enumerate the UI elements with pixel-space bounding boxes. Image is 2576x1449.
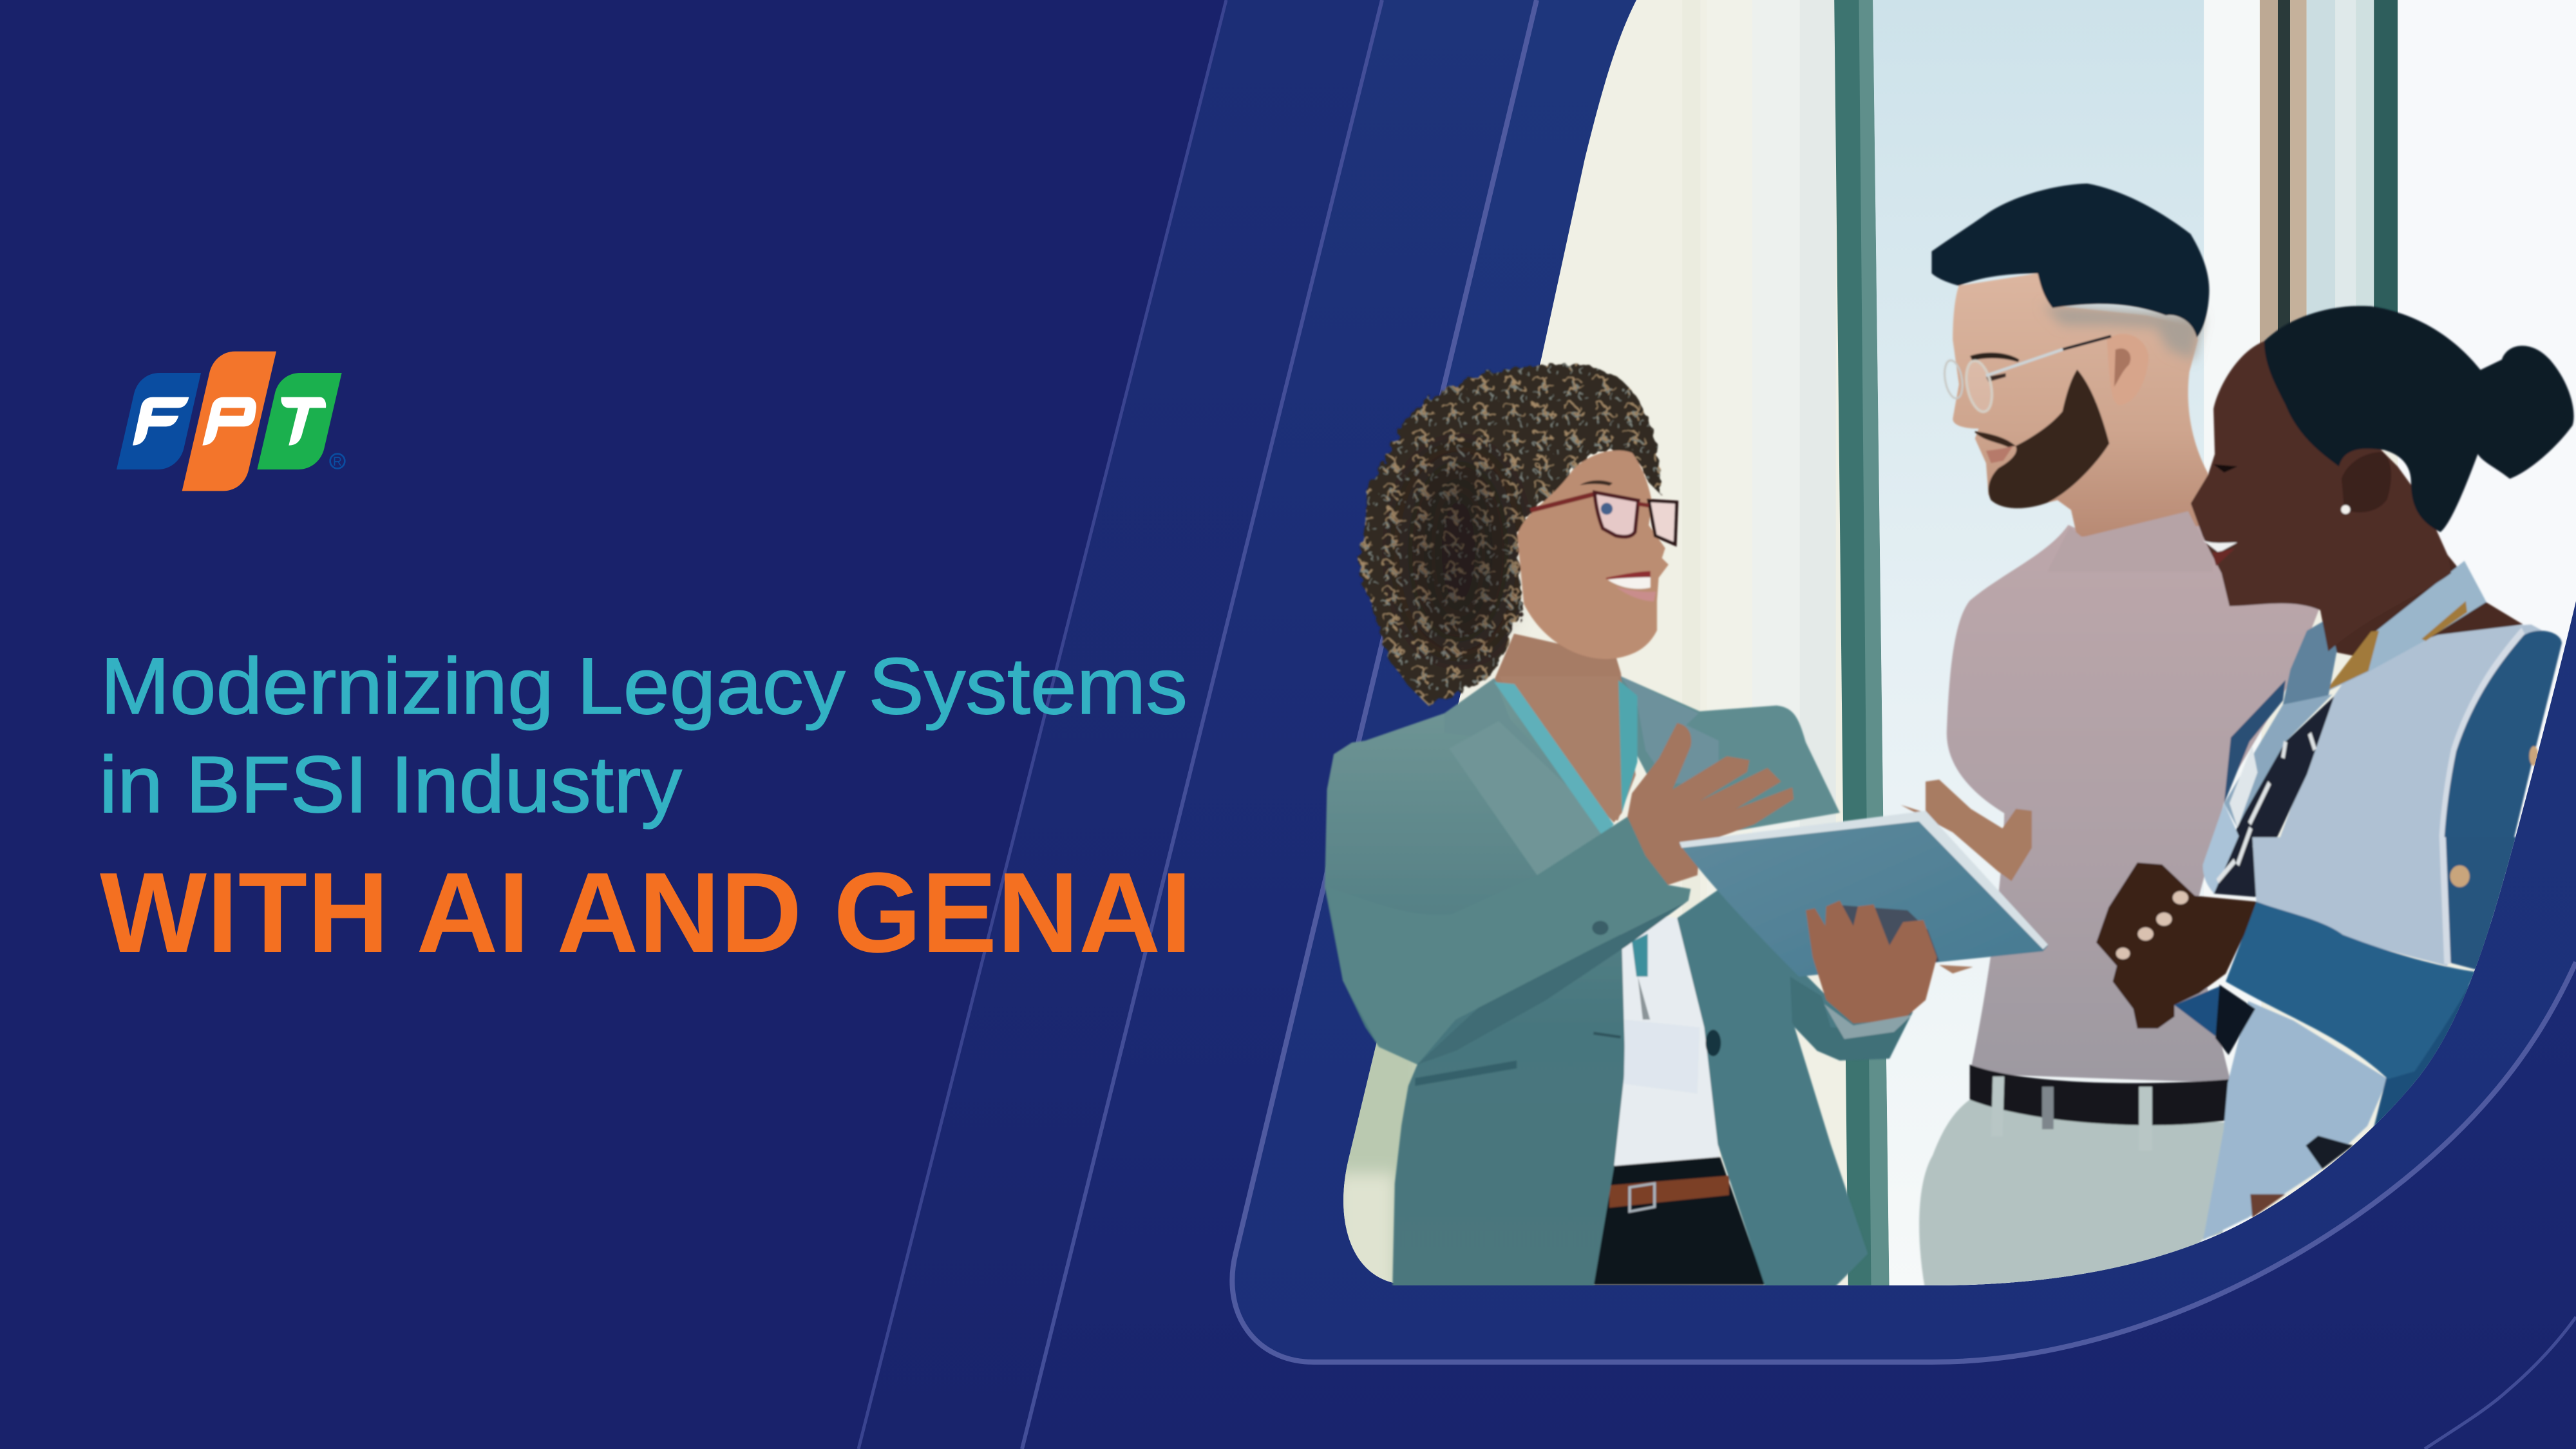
man's head [1932, 184, 2213, 572]
logo registered mark [330, 454, 345, 469]
collar [2048, 511, 2213, 572]
photo: people [1325, 184, 2574, 1287]
neck [2323, 553, 2523, 659]
blouse, trim and cardigan above the sleeve [2252, 837, 2519, 972]
hand holding tablet [1790, 977, 1912, 1061]
logo tile: T [257, 373, 342, 469]
sky [1873, 0, 2204, 1294]
man in pink sweater [1919, 184, 2319, 1286]
logo tile: F [117, 373, 201, 469]
shirt [1551, 762, 1720, 1167]
left lapel [1444, 678, 1614, 844]
woman with curly hair [1325, 363, 2048, 1287]
woman in blue cardigan [2096, 306, 2574, 1240]
tablet [1680, 811, 2048, 977]
man's hand behind tablet [1900, 780, 2032, 881]
lanyard [1494, 682, 1614, 836]
bokeh foliage [1343, 1043, 1418, 1283]
photo: window background [1288, 0, 2576, 1294]
window frame green [1834, 0, 1889, 1294]
face [2191, 341, 2451, 651]
background diagonal bands [858, 0, 2576, 1449]
jacket left front [1325, 678, 1625, 1287]
chest skin [1499, 676, 1622, 822]
ear and earring [2342, 452, 2391, 513]
sleeve [1327, 817, 1690, 1065]
raised hand [1627, 723, 1794, 885]
title line 1: Modernizing Legacy Systems [100, 642, 1188, 731]
eyeglasses [1531, 492, 1677, 544]
logo: FPT [117, 352, 345, 491]
cardigan right panel [2443, 630, 2562, 934]
logo registered mark: R [333, 455, 342, 469]
logo tile: P [182, 352, 276, 491]
scarf [2325, 561, 2486, 692]
hair and bun [2264, 306, 2574, 532]
cardigan woman lower body and clasped hands [2096, 837, 2519, 1240]
cardigan left panel [2224, 680, 2286, 803]
eyeglasses [1942, 336, 2111, 414]
ear [2107, 334, 2148, 405]
cardigan woman upper body [2191, 306, 2574, 934]
id badge [1624, 1019, 1700, 1094]
buttons [2450, 867, 2470, 887]
beard [1989, 370, 2109, 508]
jacket, shirt and hands [1325, 676, 2048, 1287]
trousers [1593, 1157, 1765, 1285]
title line 3: WITH AI AND GENAI [100, 849, 1192, 976]
head and neck [1359, 363, 1677, 821]
title line 2: in BFSI Industry [99, 741, 682, 829]
jacket upper right [1621, 676, 1840, 840]
hair [1932, 184, 2210, 337]
blouse [2259, 625, 2558, 934]
jacket right front [1677, 887, 1913, 1287]
sweater and trousers [1919, 513, 2319, 1286]
